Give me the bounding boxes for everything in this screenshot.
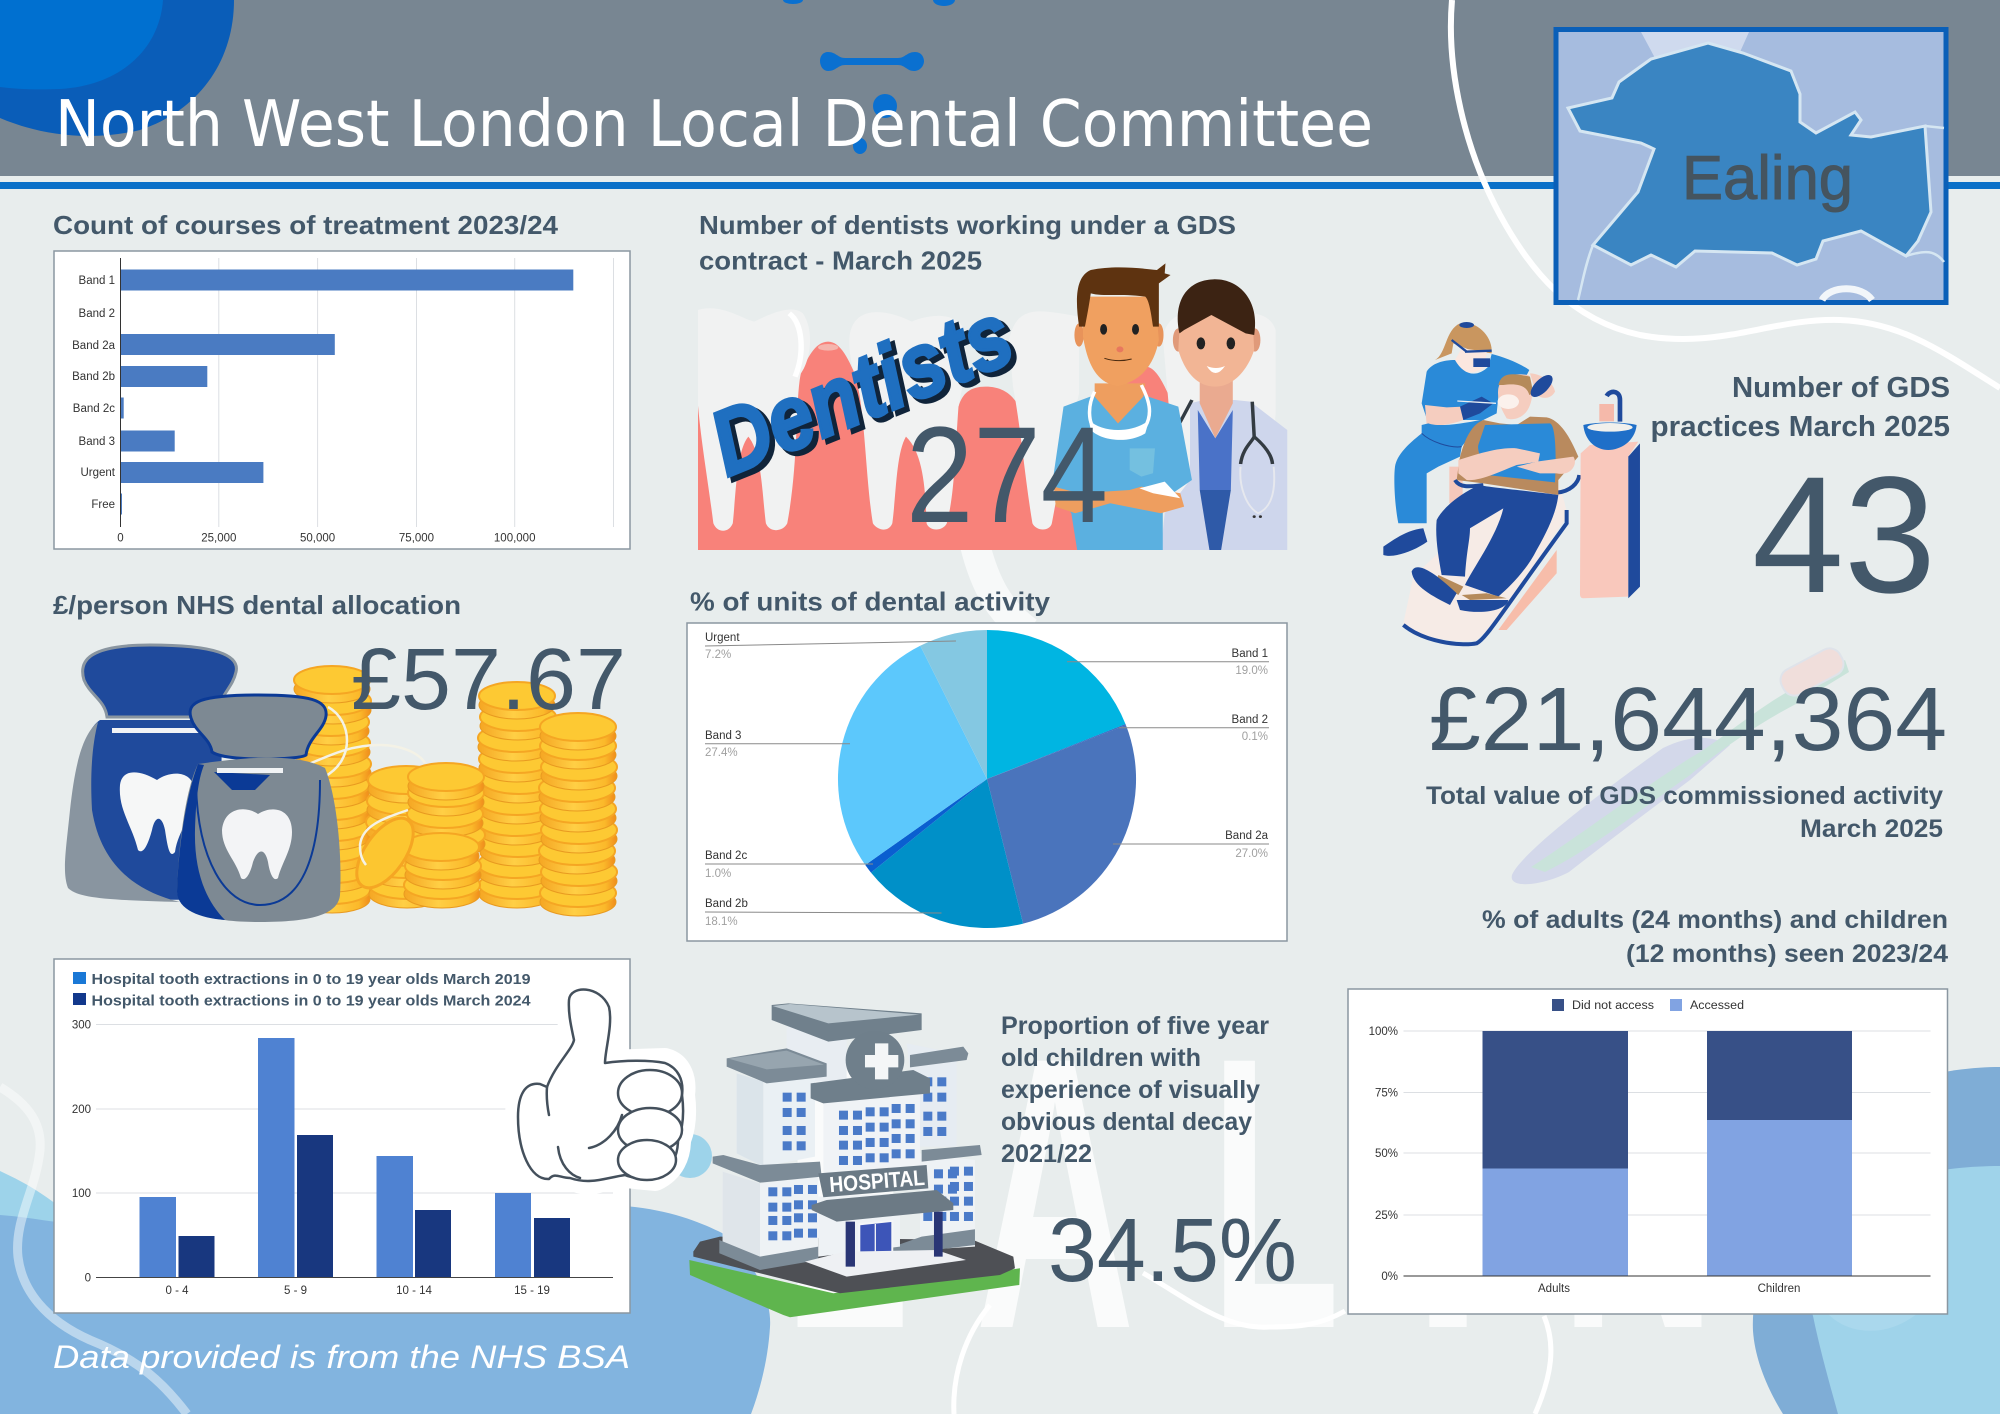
caption: total value: Total value of GDS commissioned activity <box>1426 782 1943 810</box>
bar chart: hospital tooth extractions: 5 - 9 <box>284 1285 307 1297</box>
stacked bar chart: adults and children seen: Children <box>1758 1283 1800 1295</box>
bar chart: courses of treatment: 75,000 <box>399 532 434 544</box>
header blob: outer <box>0 0 234 136</box>
pie chart: units of activity: Band 2a <box>1225 830 1269 842</box>
bar chart: courses of treatment <box>54 251 630 549</box>
pie chart: units of activity: Band 2 <box>1232 714 1268 726</box>
heading: dentists: contract - March 2025 <box>699 246 982 276</box>
illustration: coin stacks <box>293 666 617 916</box>
watermark: EALING <box>785 978 1955 1410</box>
stacked bar chart: adults and children seen <box>1348 989 1948 1314</box>
illustration: hospital building <box>689 1003 1020 1317</box>
caption: total value: March 2025 <box>1800 815 1943 843</box>
pie chart: units of activity: 27.0% <box>1235 848 1268 860</box>
watermark: EALING: I <box>1412 978 1484 1410</box>
stat: 34.5%: 34.5% <box>1048 1201 1297 1301</box>
stacked bar chart: adults and children seen: 50% <box>1375 1148 1398 1160</box>
pie chart: units of activity <box>687 623 1287 941</box>
heading: units of activity: % of units of dental activity <box>690 586 1051 616</box>
illustration: hospital building: HOSPITAL <box>828 1165 926 1197</box>
map label: Ealing <box>1682 144 1853 213</box>
bar chart: courses of treatment: Band 2b <box>72 371 115 383</box>
bar chart: courses of treatment: Band 3 <box>79 436 115 448</box>
legend: Accessed <box>1690 1000 1744 1012</box>
pie chart: units of activity: Band 2b <box>705 898 748 910</box>
heading: dentists: Number of dentists working under a GDS <box>699 210 1236 240</box>
stat: allocation per person: £57.67 <box>351 631 626 728</box>
legend: Hospital tooth extractions in 0 to 19 year olds March 2024 <box>92 992 531 1010</box>
stat: total value: £21,644,364 <box>1429 670 1947 770</box>
dentist figure <box>1435 323 1492 360</box>
hospital sign <box>818 1165 928 1197</box>
stacked bar chart: adults and children seen: Adults <box>1538 1283 1570 1295</box>
stacked bar chart: adults and children seen: 75% <box>1375 1088 1398 1100</box>
heading: adults and children seen <box>1482 906 1948 968</box>
heading: adults and children seen: (12 months) seen 2023/24 <box>1626 940 1948 968</box>
heading: number of practices <box>1650 372 1950 443</box>
illustration: female doctor <box>1161 279 1287 550</box>
heading: number of practices: practices March 2025 <box>1650 411 1950 443</box>
text block: proportion of five year olds: Proportion of five year <box>1001 1012 1269 1040</box>
bar chart: courses of treatment: 50,000 <box>300 532 335 544</box>
heading: dentists <box>699 210 1236 276</box>
background blobs: bottom left <box>0 1134 770 1414</box>
title: North West London Local Dental Committee <box>55 88 1373 162</box>
bar chart: courses of treatment: Band 2 <box>79 308 115 320</box>
pie chart: units of activity: Band 1 <box>1232 648 1268 660</box>
chair <box>1403 483 1567 641</box>
bar chart: hospital tooth extractions: 0 <box>85 1272 91 1284</box>
legend: Hospital tooth extractions in 0 to 19 year olds March 2019 <box>92 971 530 988</box>
bar chart: hospital tooth extractions: 0 - 4 <box>165 1285 189 1297</box>
pie chart: units of activity: 27.4% <box>705 747 738 759</box>
watermark: EALING: N <box>1560 978 1716 1410</box>
pie chart: units of activity: 7.2% <box>705 649 731 661</box>
watermark: EALING: A <box>975 978 1135 1410</box>
pie chart: units of activity: 18.1% <box>705 916 738 928</box>
bar chart: hospital tooth extractions: 300 <box>72 1020 91 1032</box>
stacked bar chart: adults and children seen: 0% <box>1381 1271 1398 1283</box>
medical cross sign <box>846 1031 904 1089</box>
stacked bar chart: adults and children seen: 25% <box>1375 1210 1398 1222</box>
illustration: male dentist <box>1052 263 1192 550</box>
entrance <box>805 1250 966 1277</box>
illustration: toothbrush <box>1512 644 1849 884</box>
patient figure <box>1530 373 1555 398</box>
text block: proportion of five year olds: 2021/22 <box>1001 1140 1092 1168</box>
pie chart: units of activity: Urgent <box>705 632 740 644</box>
heading: allocation: £/person NHS dental allocation <box>53 590 461 620</box>
illustration: floss pack back <box>65 645 236 902</box>
bar chart: hospital tooth extractions: 15 - 19 <box>514 1285 550 1297</box>
pie chart: units of activity: 19.0% <box>1235 665 1268 677</box>
legend <box>1552 999 1744 1012</box>
bar chart: courses of treatment: 25,000 <box>201 532 236 544</box>
stat: 43 practices: 43 <box>1752 443 1936 628</box>
bar chart: courses of treatment: Urgent <box>80 467 116 479</box>
text block: proportion of five year olds: old children with <box>1001 1044 1201 1072</box>
bar chart: hospital tooth extractions <box>54 959 630 1313</box>
bar chart: hospital tooth extractions: 10 - 14 <box>396 1285 433 1297</box>
watermark: EALING: E <box>785 978 910 1410</box>
bar chart: courses of treatment: 0 <box>117 532 124 544</box>
text block: proportion of five year olds: obvious dental decay <box>1001 1108 1252 1136</box>
stat: 274 dentists: 274 <box>906 399 1108 552</box>
header band <box>0 0 2000 189</box>
bar chart: courses of treatment: Band 2a <box>72 340 116 352</box>
text block: proportion of five year olds: experience of visually <box>1001 1076 1260 1104</box>
bar chart: courses of treatment: 100,000 <box>494 532 535 544</box>
blocks <box>787 1027 847 1082</box>
footer note: Data provided is from the NHS BSA <box>53 1339 630 1375</box>
base <box>689 1260 1020 1317</box>
pie chart: units of activity: 0.1% <box>1242 731 1268 743</box>
pie chart: units of activity: 1.0% <box>705 868 731 880</box>
legend: Did not access <box>1572 1000 1654 1012</box>
pie chart: units of activity: Band 3 <box>705 730 741 742</box>
bar chart: courses of treatment: Band 2c <box>73 403 115 415</box>
watermark: EALING: L <box>1210 978 1340 1410</box>
illustration: dentist treating patient <box>1383 322 1640 644</box>
pie chart: units of activity: Band 2c <box>705 850 747 862</box>
basin <box>1580 442 1638 598</box>
header blob: inner <box>0 0 163 89</box>
illustration: floss pack front <box>177 695 340 922</box>
heading: adults and children seen: % of adults (24 months) and children <box>1482 906 1948 934</box>
bar chart: courses of treatment: Free <box>91 499 115 511</box>
dental floss dumbbell motif <box>783 0 955 154</box>
icon: thumbs up <box>518 990 683 1181</box>
heading: courses of treatment: Count of courses of treatment 2023/24 <box>53 210 559 240</box>
text block: proportion of five year olds <box>1001 1012 1269 1168</box>
stacked bar chart: adults and children seen: 100% <box>1369 1026 1398 1038</box>
wordmark: Dentists: Dentists <box>696 283 1027 496</box>
wordmark: Dentists: Dentists <box>701 286 1031 499</box>
heading: number of practices: Number of GDS <box>1732 372 1950 404</box>
illustration: teeth and gums <box>698 308 1276 550</box>
bar chart: hospital tooth extractions: 200 <box>72 1104 91 1116</box>
caption: total value <box>1426 782 1943 843</box>
bar chart: courses of treatment: Band 1 <box>79 275 115 287</box>
bar chart: hospital tooth extractions: 100 <box>72 1188 91 1200</box>
roofs <box>772 1003 922 1042</box>
background blobs: bottom right <box>1753 1067 2000 1414</box>
map: Ealing <box>1556 30 1946 302</box>
legend <box>73 971 531 1010</box>
